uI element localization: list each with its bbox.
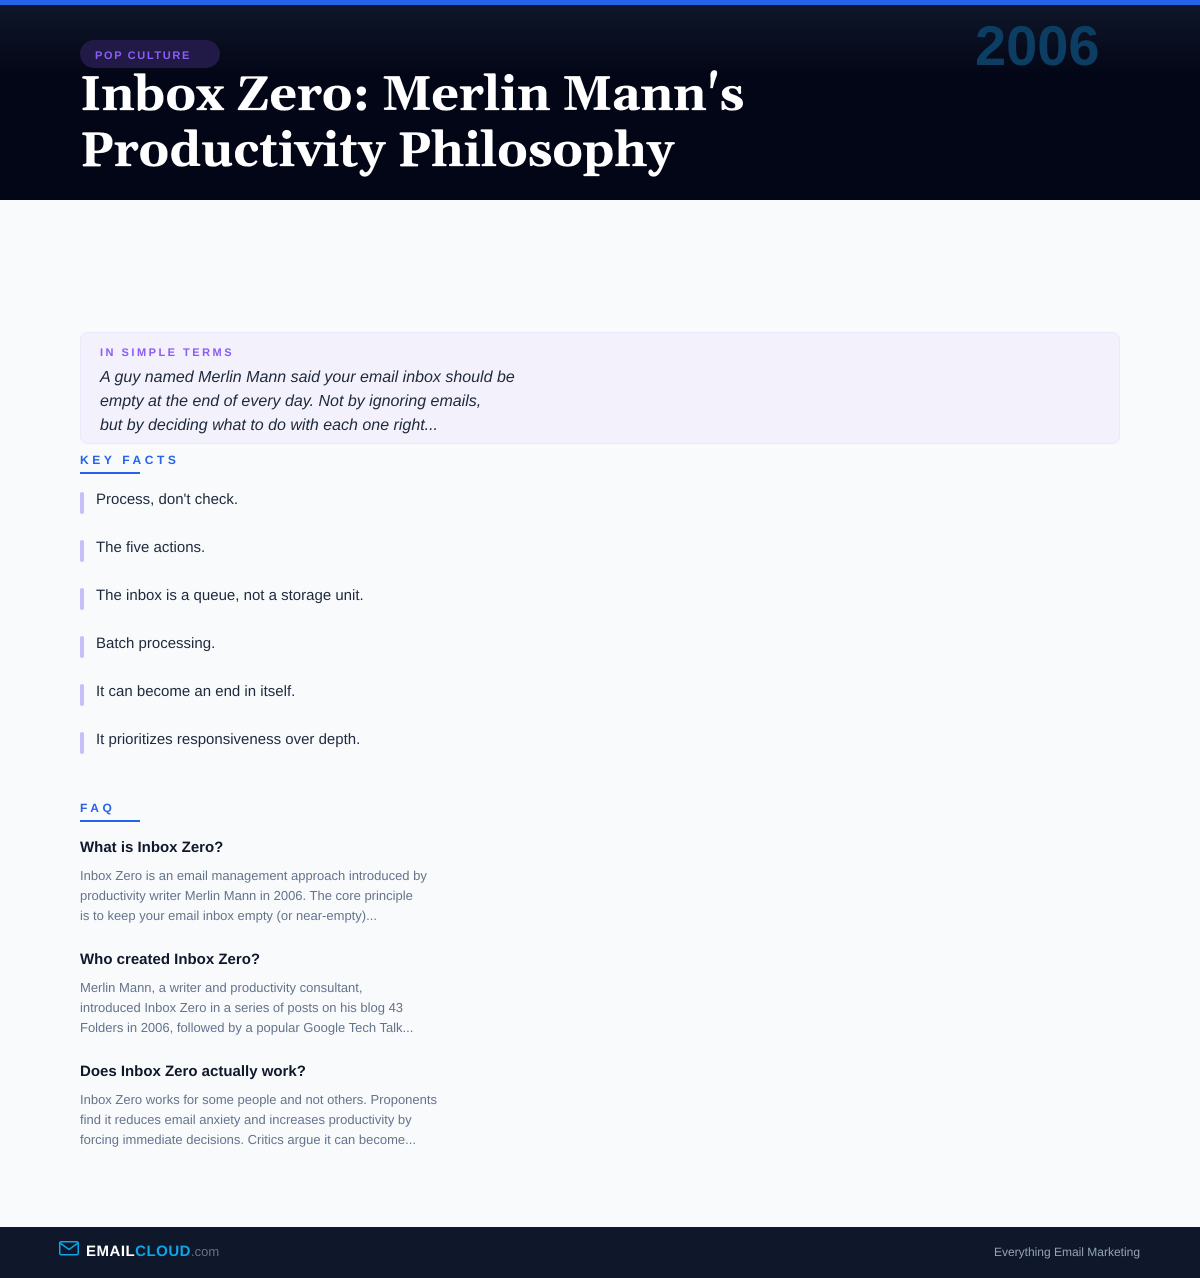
fact 1: Process, don't check. [96,491,238,508]
answer: Inbox Zero is an email management approach introduced by [80,868,427,883]
question: Who created Inbox Zero? [80,951,260,968]
year: 2006 [975,14,1100,77]
icon: envelope [59,1241,79,1256]
header band [0,0,1200,200]
question: Does Inbox Zero actually work? [80,1063,306,1080]
fact 5: It can become an end in itself. [96,683,295,700]
answer: is to keep your email inbox empty (or near-empty)... [80,908,377,923]
fact 1 [80,491,238,514]
category badge [80,40,220,68]
tagline: Everything Email Marketing [994,1245,1140,1259]
footer [0,1227,1200,1278]
panel text: A guy named Merlin Mann said your email inbox should be [100,369,515,386]
faq 2 [80,951,413,1035]
brand logo: EMAILCLOUD.com [86,1243,219,1260]
title [80,66,744,183]
panel label: IN SIMPLE TERMS [100,347,234,359]
title: Productivity Philosophy [80,122,674,183]
fact 4: Batch processing. [96,635,215,652]
fact 2: The five actions. [96,539,205,556]
fact 5 [80,683,295,706]
panel text: but by deciding what to do with each one right... [100,417,438,434]
fact 3: The inbox is a queue, not a storage unit. [96,587,364,604]
panel text [99,369,515,434]
fact 4 [80,635,215,658]
fact 6 [80,731,360,754]
answer: find it reduces email anxiety and increases productivity by [80,1112,412,1127]
title: Inbox Zero: Merlin Mann's [80,66,744,127]
faq 3 [80,1063,437,1147]
category badge: POP CULTURE [95,50,191,62]
key facts list [80,491,364,754]
answer: Merlin Mann, a writer and productivity consultant, [80,980,363,995]
heading: key facts: KEY FACTS [80,453,180,467]
fact 2 [80,539,205,562]
answer: introduced Inbox Zero in a series of posts on his blog 43 [80,1000,403,1015]
faq 1 [80,839,427,923]
fact 3 [80,587,364,610]
answer: productivity writer Merlin Mann in 2006. The core principle [80,888,413,903]
answer [80,1092,437,1147]
panel text: empty at the end of every day. Not by ignoring emails, [100,393,481,410]
question: What is Inbox Zero? [80,839,223,856]
panel: in simple terms [80,332,1120,444]
answer: Inbox Zero works for some people and not others. Proponents [80,1092,437,1107]
answer: Folders in 2006, followed by a popular Google Tech Talk... [80,1020,413,1035]
heading: faq: FAQ [80,801,115,815]
fact 6: It prioritizes responsiveness over depth. [96,731,360,748]
answer: forcing immediate decisions. Critics argue it can become... [80,1132,416,1147]
answer [80,980,413,1035]
answer [80,868,427,923]
